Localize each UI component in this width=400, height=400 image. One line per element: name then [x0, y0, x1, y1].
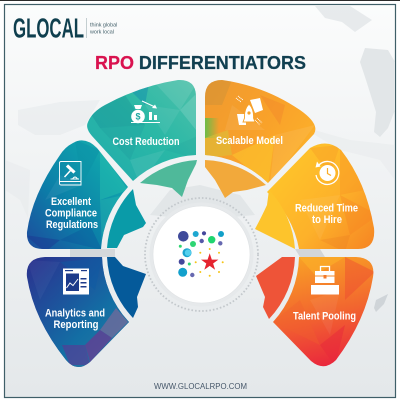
- label: Analytics and: [45, 308, 105, 320]
- star with sparks: [195, 248, 224, 277]
- inner petal: scalable model: [205, 160, 266, 198]
- panel: talent pooling: [273, 257, 374, 366]
- panel: analytics and reporting: [26, 257, 129, 367]
- label: [295, 202, 358, 226]
- icon: gavel on book: [60, 162, 81, 185]
- inner petal: cost reduction: [140, 160, 197, 197]
- label: Cost Reduction: [112, 136, 180, 148]
- icon: rocket with documents: [236, 96, 263, 125]
- inner petal: reduced time: [255, 190, 295, 249]
- logo wordmark: GLOCAL: [13, 12, 84, 44]
- label: [45, 308, 105, 331]
- label: Scalable Model: [216, 135, 283, 147]
- icon: browser window with chart: [63, 268, 89, 294]
- segment shape: [205, 80, 316, 183]
- segment shape: [273, 257, 374, 366]
- panel: scalable model: [205, 80, 316, 183]
- panel: cost reduction: [87, 80, 196, 181]
- logo tagline: think global: [90, 22, 117, 28]
- website url: WWW.GLOCALRPO.COM: [154, 382, 247, 391]
- label: Reporting: [54, 319, 98, 331]
- inner petal: compliance: [107, 189, 146, 248]
- icon: briefcase over bricks: [311, 266, 339, 294]
- icon: clock with return arrow: [316, 161, 339, 184]
- logo dots: [178, 231, 224, 277]
- top edge: [0, 0, 400, 1]
- panel: excellent compliance regulations: [26, 140, 128, 249]
- title: RPO DIFFERENTIATORS: [95, 52, 306, 73]
- icon: money bag and falling bars: $: [135, 112, 141, 122]
- segment shape: [267, 144, 374, 249]
- label: Regulations: [46, 219, 98, 231]
- inner petal: analytics: [107, 257, 146, 318]
- label: to Hire: [312, 214, 342, 226]
- inner petal: talent: [256, 257, 295, 319]
- label: Reduced Time: [295, 202, 358, 214]
- label: Talent Pooling: [293, 310, 356, 322]
- world map backdrop: [5, 6, 395, 312]
- logo: work local: [89, 30, 114, 36]
- segment shape: [26, 140, 128, 249]
- panel: reduced time to hire: [267, 144, 374, 249]
- label: [45, 196, 98, 231]
- center medallion: [145, 198, 258, 311]
- white disc: [153, 206, 250, 303]
- segment shape: [87, 80, 196, 181]
- label: Excellent: [51, 196, 91, 208]
- label: Compliance: [45, 208, 97, 220]
- logo: [13, 12, 117, 44]
- dotted ring: [150, 202, 254, 306]
- segment shape: [26, 257, 129, 367]
- logo divider: [85, 18, 88, 38]
